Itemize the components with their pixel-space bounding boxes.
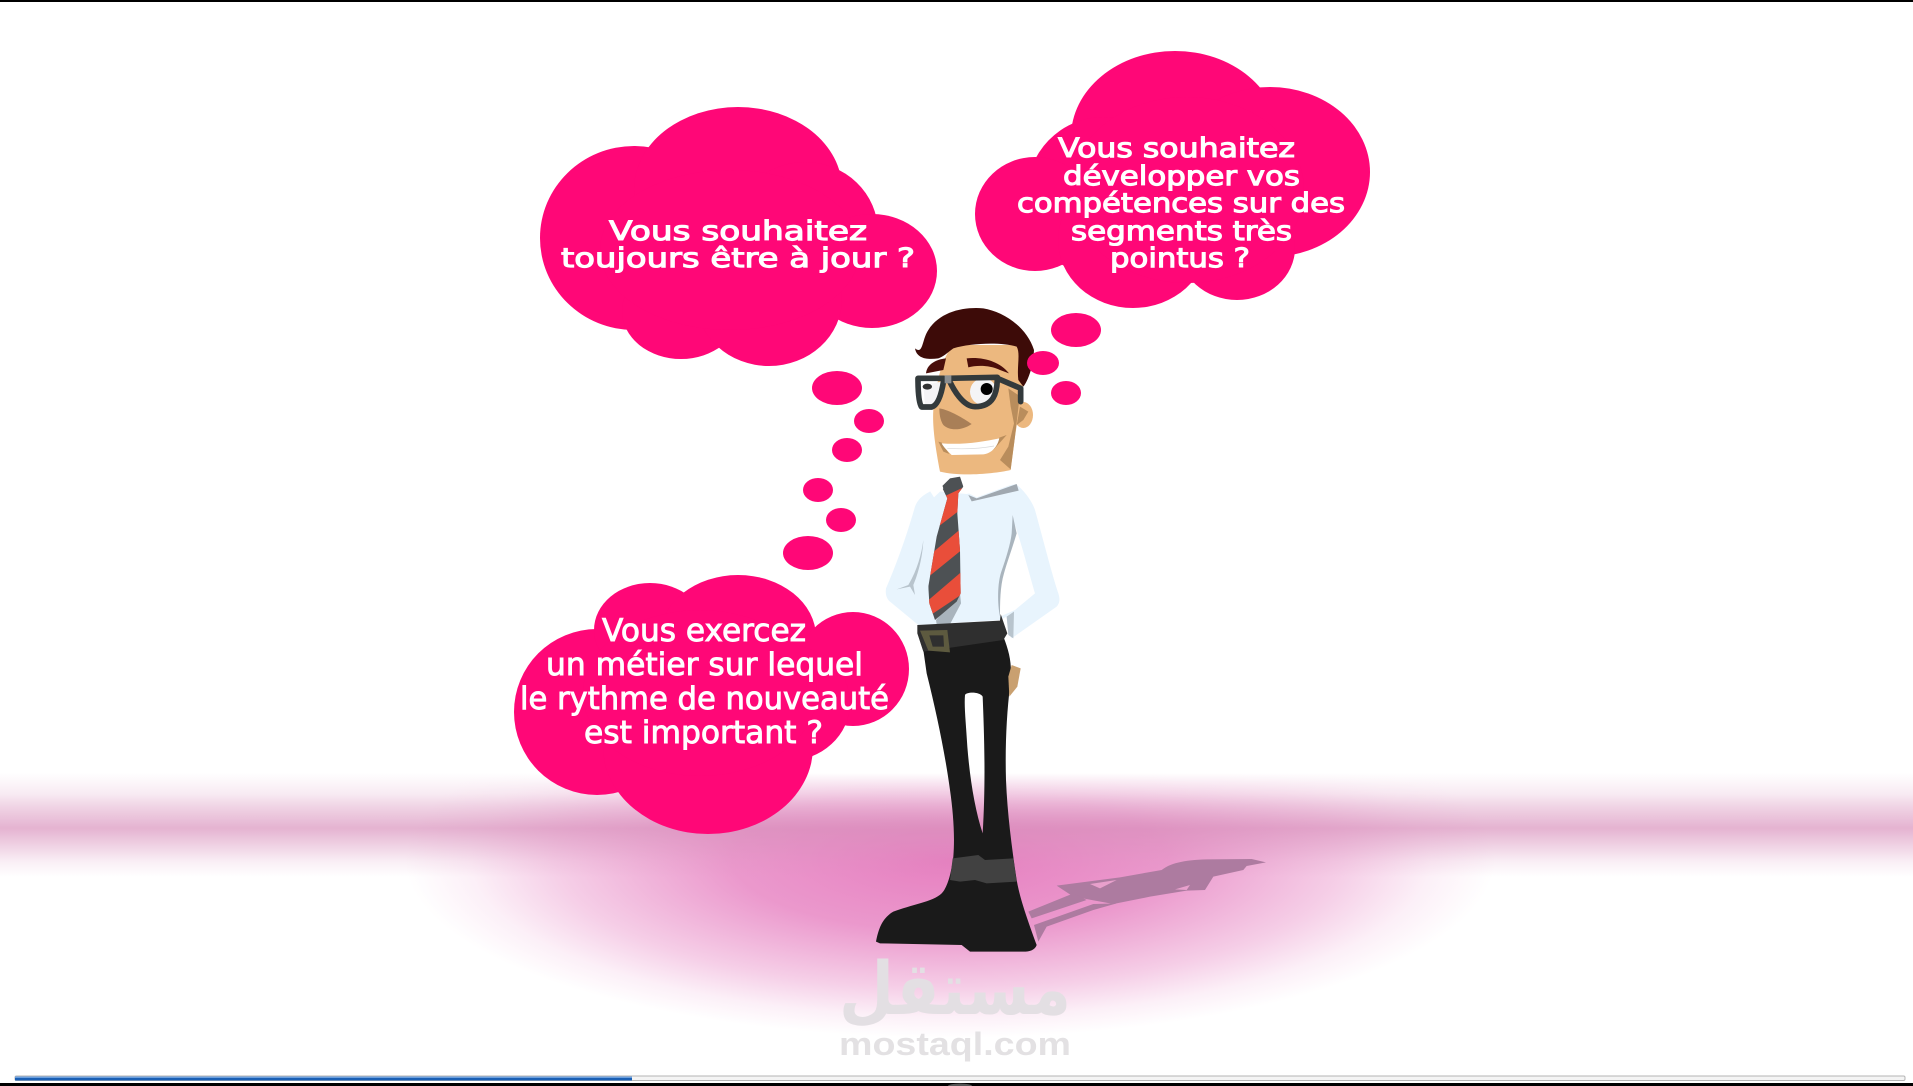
cloud text: Vous souhaitez [1058,133,1295,164]
hair [915,308,1034,387]
nose [939,408,972,429]
head [915,308,1034,474]
shirt [886,484,1059,638]
necktie [928,476,964,620]
cloud text: le rythme de nouveauté [520,681,889,717]
cloud shape [514,575,909,834]
video progress bar [0,1076,1913,1086]
cloud text [520,613,889,751]
ear [1014,402,1033,428]
torso, arms and tie [886,473,1059,697]
cloud text: compétences sur des [1017,188,1345,219]
cloud shape [975,51,1370,308]
floor glow [0,670,1913,1038]
thought bubbles: left trail [783,371,884,570]
eyes [970,378,997,405]
belt buckle [920,630,950,652]
glasses [918,377,1021,407]
face shadow [1000,388,1021,469]
cloud text [1017,133,1345,274]
mouth [938,435,1007,454]
belt [917,614,1007,652]
character shadow [1028,859,1266,942]
collar [968,484,1019,501]
cloud text: pointus ? [1110,243,1250,274]
character: businessman [876,308,1059,952]
watermark [839,947,1071,1062]
thought cloud: développer vos compétences [975,51,1370,308]
hand [1008,665,1021,697]
cloud text: Vous exercez [602,613,806,649]
cloud text: un métier sur lequel [546,647,863,683]
cloud text: Vous souhaitez [609,216,867,247]
shirt shadows [998,515,1017,617]
eyebrow [967,358,1009,373]
legs and shoes [876,637,1037,952]
top border [0,0,1913,2]
cloud text [561,216,915,274]
thought bubbles: right trail [1027,313,1101,405]
cloud text: est important ? [584,715,823,751]
thought cloud: métier rythme de nouveauté [514,575,909,834]
watermark: mostaql.com [839,1026,1071,1062]
thought cloud: toujours être à jour [540,107,937,366]
cloud text: toujours être à jour ? [561,243,915,274]
watermark: مستقل [839,947,1071,1032]
face [933,345,1023,474]
cloud text: segments très [1071,216,1292,247]
cloud text: développer vos [1063,161,1300,192]
cloud shape [540,107,937,366]
